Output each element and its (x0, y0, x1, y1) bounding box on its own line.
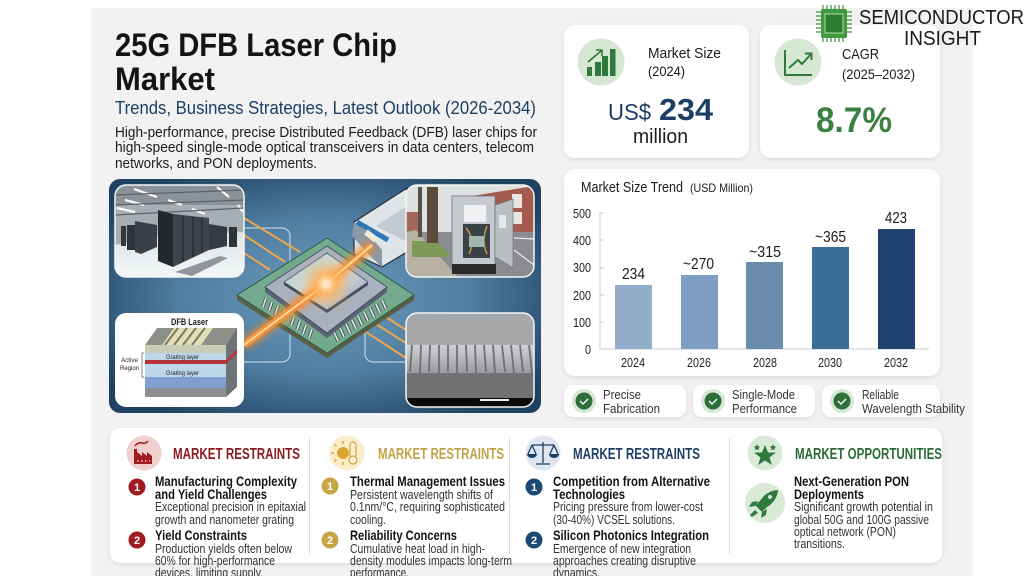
logo (816, 5, 1024, 50)
column: market opportunities: global 50G and 100G passive (794, 513, 929, 527)
illustration panel (109, 179, 541, 413)
column: market opportunities: Next-Generation PON (794, 473, 909, 489)
chip on circuit board (237, 238, 414, 358)
column: manufacturing restraints: Manufacturing Complexity (155, 473, 297, 489)
column: manufacturing restraints: 1 (134, 482, 140, 494)
column: competition restraints: 2 (531, 535, 537, 547)
feature pill: single-mode performance: Performance (732, 401, 797, 416)
logo: INSIGHT (904, 28, 981, 50)
column: competition restraints: Technologies (553, 486, 625, 502)
column: thermal restraints: Thermal Management Issues (350, 473, 505, 489)
y axis labels: 300 (573, 260, 591, 275)
card: market size: million (633, 126, 688, 148)
inset: DFB laser diagram: Active (121, 358, 139, 364)
inset: DFB laser diagram: Grating layer (166, 355, 199, 361)
panel: market size trend chart (564, 169, 940, 376)
column: thermal restraints: Reliability Concerns (350, 527, 457, 543)
icon: rocket (745, 483, 785, 523)
panel: market size trend chart: Market Size Trend (581, 180, 683, 196)
column: competition restraints: approaches creating disruptive (553, 554, 696, 568)
inset: DFB laser diagram: DFB Laser (171, 317, 208, 328)
column: market opportunities: MARKET OPPORTUNITIES (795, 446, 942, 463)
card: CAGR: 8.7% (816, 101, 892, 140)
column: competition restraints: MARKET RESTRAINTS (573, 446, 700, 463)
subtitle: Trends, Business Strategies, Latest Outlook (2026-2034) (115, 98, 536, 118)
feature pill: reliable wavelength stability (822, 385, 965, 417)
column: manufacturing restraints: MARKET RESTRAINTS (173, 446, 300, 463)
column: manufacturing restraints: growth and nanometer grating (155, 513, 294, 527)
column: thermal restraints: cooling. (350, 513, 386, 527)
column: market opportunities: Deployments (794, 486, 864, 502)
description text: High-performance, precise Distributed Feedback (DFB) laser chips for (115, 125, 537, 141)
x axis labels: 2026 (687, 355, 711, 370)
card: CAGR: CAGR (842, 46, 879, 63)
x axis labels (621, 355, 908, 370)
column: thermal restraints: Persistent wavelength shifts of (350, 488, 493, 502)
description text: high-speed single-mode optical transceivers in data centers, telecom (115, 140, 534, 156)
column: thermal restraints: Cumulative heat load in high- (350, 542, 485, 556)
icon: factory (126, 436, 162, 470)
card: market size (564, 25, 749, 158)
y axis labels: 200 (573, 288, 591, 303)
column: market opportunities: transitions. (794, 537, 845, 551)
title: Market (115, 61, 215, 97)
feature pill: single-mode performance: Single-Mode (732, 387, 795, 402)
feature pill: reliable wavelength stability: Reliable (862, 387, 899, 402)
column: thermal restraints: 2 (327, 535, 333, 547)
column: competition restraints: Silicon Photonics Integration (553, 527, 709, 543)
column: manufacturing restraints: Exceptional precision in epitaxial (155, 500, 306, 514)
column: thermal restraints: MARKET RESTRAINTS (378, 446, 504, 463)
inset photo: data center (115, 185, 244, 277)
feature pill: precise fabrication: Precise (603, 387, 641, 402)
panel: market size trend chart: (USD Million) (690, 181, 753, 195)
column: market opportunities: optical network (PON) (794, 525, 896, 539)
chip pins (263, 298, 386, 341)
thin orange beams (244, 218, 406, 358)
connector outlines (244, 228, 406, 362)
column: manufacturing restraints: 2 (134, 535, 140, 547)
icon: chip logo (816, 5, 852, 42)
bar values: ~315 (749, 244, 781, 261)
column: manufacturing restraints: 60% for high-performance (155, 554, 275, 568)
inset: DFB laser diagram: Region (120, 366, 139, 372)
card: market size: US$ (608, 99, 651, 125)
feature pill: single-mode performance (693, 385, 815, 417)
description text (115, 125, 537, 172)
x axis labels: 2024 (621, 355, 645, 370)
title (115, 27, 397, 97)
card: market size: Market Size (648, 45, 721, 62)
bar values: ~365 (815, 229, 846, 246)
column: manufacturing restraints: Yield Constraints (155, 527, 247, 543)
y axis labels: 500 (573, 206, 591, 221)
inset photo: street cabinet (406, 185, 534, 277)
feature pill: precise fabrication (564, 385, 686, 417)
bars (615, 229, 915, 349)
feature pill: precise fabrication: Fabrication (603, 401, 660, 416)
bar values: 234 (622, 266, 645, 283)
column: competition restraints: 1 (531, 482, 537, 494)
description text: networks, and PON deployments. (115, 156, 317, 172)
icon: star (748, 436, 782, 470)
icon: balance scale (526, 436, 560, 470)
y axis labels: 400 (573, 233, 591, 248)
main laser beam (244, 245, 372, 345)
inset: DFB laser diagram (115, 313, 244, 407)
column: competition restraints (526, 436, 710, 576)
column: manufacturing restraints: Production yields often below (155, 542, 293, 556)
column: thermal restraints: 1 (327, 481, 333, 493)
column: manufacturing restraints (126, 436, 306, 576)
column: competition restraints: Pricing pressure from lower-cost (553, 500, 703, 514)
card: market size: (2024) (648, 63, 685, 79)
bar values: 423 (885, 210, 907, 227)
transceiver module (352, 188, 407, 267)
bar values (622, 210, 907, 283)
inset: DFB laser diagram: Grating layer (166, 371, 199, 377)
column: thermal restraints: 0.1nm/°C, requiring sophisticated (350, 500, 505, 514)
x axis labels: 2032 (884, 355, 908, 370)
title: 25G DFB Laser Chip (115, 27, 397, 63)
card: CAGR (760, 25, 940, 158)
column: competition restraints: Competition from Alternative (553, 473, 710, 489)
y axis labels (573, 206, 591, 357)
feature pill: reliable wavelength stability: Wavelength Stability (862, 401, 965, 416)
icon: sun and thermometer (330, 436, 364, 470)
inset photo: grating micrograph (406, 313, 534, 407)
column: competition restraints: Emergence of new integration (553, 542, 691, 556)
icon: line chart (774, 38, 822, 86)
column: market opportunities: Significant growth potential in (794, 500, 933, 514)
icon: growth bars (578, 38, 624, 86)
y axis labels: 0 (585, 342, 591, 357)
x axis labels: 2028 (753, 355, 777, 370)
x axis labels: 2030 (818, 355, 842, 370)
y axis labels: 100 (573, 315, 591, 330)
column: thermal restraints: density modules impacts long-term (350, 554, 512, 568)
panel: restraints and opportunities (110, 428, 942, 576)
card: CAGR: (2025–2032) (842, 66, 915, 82)
column: competition restraints: (30-40%) VCSEL solutions. (553, 513, 675, 527)
bar values: ~270 (683, 256, 714, 273)
column: thermal restraints (322, 436, 512, 576)
card: market size: 234 (659, 92, 714, 127)
column: manufacturing restraints: and Yield Challenges (155, 486, 267, 502)
column: market opportunities (745, 436, 942, 551)
